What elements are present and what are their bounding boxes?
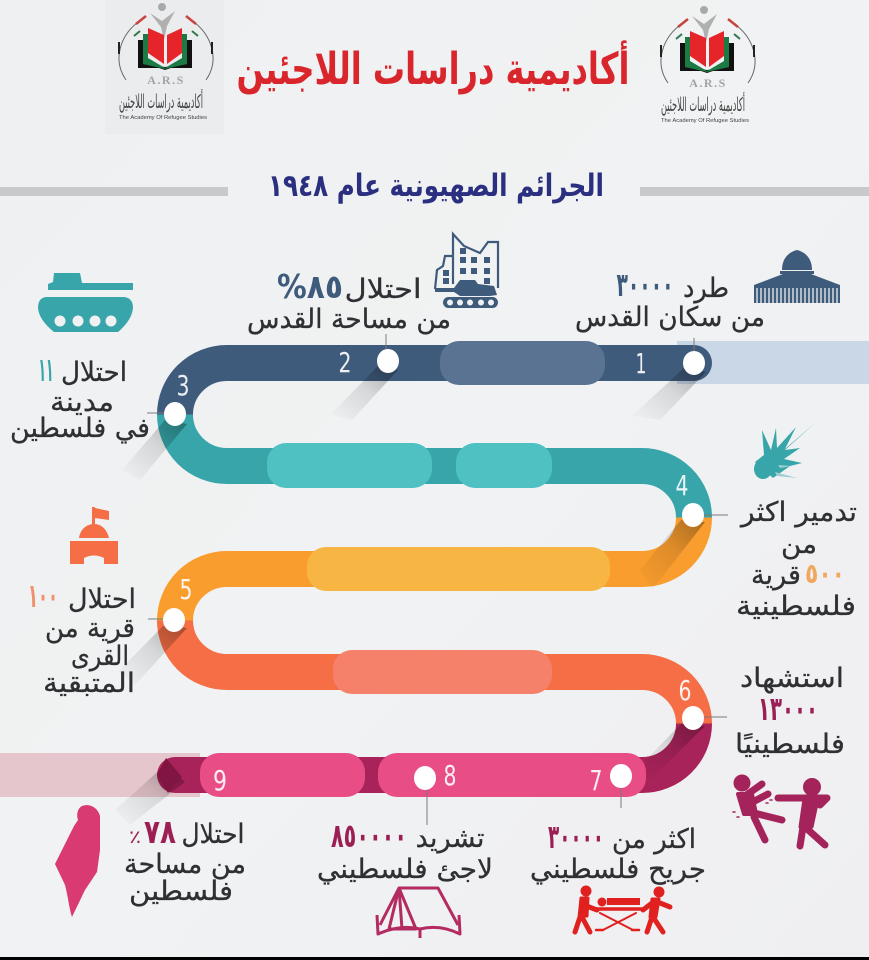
milestone numbers: 4 bbox=[676, 469, 688, 502]
label 9 bbox=[124, 812, 246, 907]
highlight pills bbox=[200, 341, 646, 797]
label 9: من مساحة bbox=[124, 849, 246, 880]
icon: tank bbox=[38, 273, 133, 332]
label 4: ٥٠٠ bbox=[805, 557, 845, 590]
label 7 bbox=[530, 817, 706, 885]
milestone numbers: 2 bbox=[338, 346, 352, 379]
label 5 bbox=[28, 576, 136, 699]
label 9: ٪ bbox=[129, 827, 141, 848]
label 5: المتبقية bbox=[43, 668, 135, 699]
segment: navy bbox=[175, 345, 712, 414]
end bands bbox=[0, 341, 869, 797]
bottom strip bbox=[0, 957, 869, 960]
label 5: احتلال bbox=[68, 584, 136, 615]
label 4: فلسطينية bbox=[736, 591, 856, 622]
icon: castle with flag bbox=[70, 507, 118, 564]
logo: Academy of Refugee Studies (left): A.R.S bbox=[147, 73, 185, 87]
label 1: ٣٠٠٠٠ bbox=[616, 265, 674, 304]
label 3: مدينة bbox=[50, 387, 114, 418]
text: أكاديمية دراسات اللاجئين bbox=[119, 89, 203, 113]
label 6: ١٣٠٠٠ bbox=[758, 689, 818, 728]
icon: dome of the rock bbox=[754, 250, 840, 303]
logo: Academy of Refugee Studies (right): The Academy Of Refugee Studies bbox=[661, 118, 750, 124]
logo: Academy of Refugee Studies (left) bbox=[119, 3, 213, 121]
milestone numbers: 8 bbox=[444, 759, 456, 792]
label 6: استشهاد bbox=[740, 663, 844, 694]
leader lines bbox=[147, 334, 728, 825]
label 1 bbox=[575, 265, 765, 333]
icon: stretcher with wounded bbox=[575, 886, 670, 932]
milestone numbers bbox=[176, 346, 692, 797]
milestone numbers: 7 bbox=[590, 764, 602, 797]
milestone dots bbox=[163, 349, 705, 790]
segment: teal bbox=[175, 414, 694, 518]
icon: tent bbox=[377, 888, 460, 938]
label 8 bbox=[317, 816, 493, 885]
icon: map of Palestine bbox=[55, 805, 100, 917]
milestone numbers: 1 bbox=[636, 347, 646, 380]
label 5: القرى bbox=[71, 641, 129, 672]
label 2: احتلال bbox=[344, 274, 422, 305]
label 6 bbox=[735, 663, 845, 760]
label 9: احتلال bbox=[182, 819, 244, 850]
label 7: اكثر من bbox=[612, 824, 696, 855]
text: أكاديمية دراسات اللاجئين bbox=[661, 92, 745, 116]
label 6: فلسطينيًا bbox=[735, 729, 845, 760]
milestone numbers: 6 bbox=[678, 674, 692, 707]
label 8: تشريد bbox=[416, 823, 484, 854]
label 9: فلسطين bbox=[129, 876, 233, 907]
label 2: ٨٥% bbox=[277, 267, 343, 306]
label 1: من سكان القدس bbox=[575, 302, 765, 333]
label 4: قرية bbox=[751, 560, 801, 591]
label 8: لاجئ فلسطيني bbox=[317, 854, 493, 885]
subtitle: الجرائم الصهيونية عام ١٩٤٨ bbox=[268, 168, 604, 204]
label 4 bbox=[736, 497, 857, 622]
label 2: من مساحة القدس bbox=[247, 304, 451, 335]
label 3: احتلال bbox=[61, 357, 127, 388]
label 1: طرد bbox=[683, 273, 729, 304]
label 5: ١٠٠ bbox=[28, 576, 58, 615]
label 3: في فلسطين bbox=[10, 413, 150, 444]
milestone numbers: 9 bbox=[213, 764, 227, 797]
timeline track bbox=[0, 341, 869, 797]
logo: Academy of Refugee Studies (left): The Academy Of Refugee Studies bbox=[119, 115, 208, 121]
logo: Academy of Refugee Studies (right): A.R.S bbox=[689, 76, 727, 90]
segment: coral bbox=[175, 620, 694, 724]
label 4: تدمير اكثر bbox=[739, 497, 857, 528]
milestone numbers: 3 bbox=[176, 369, 190, 402]
segment: orange bbox=[175, 518, 694, 620]
icon: explosion bbox=[754, 423, 815, 479]
left logo backdrop bbox=[105, 0, 224, 134]
logo: Academy of Refugee Studies (right) bbox=[661, 6, 755, 124]
subtitle bars bbox=[0, 187, 869, 196]
label 9: ٧٨ bbox=[144, 812, 176, 851]
label 7: ٣٠٠٠٠ bbox=[548, 817, 604, 856]
maroon end chevron bbox=[157, 758, 182, 793]
milestone numbers: 5 bbox=[180, 573, 192, 606]
label 5: قرية من bbox=[45, 613, 135, 644]
icon: ruined building with tank bbox=[435, 234, 498, 308]
label 7: جريح فلسطيني bbox=[530, 854, 706, 885]
icon: shooting figures bbox=[733, 775, 827, 846]
label 4: من bbox=[781, 529, 817, 560]
diagonal shadows bbox=[115, 366, 706, 825]
segment: maroon bbox=[157, 724, 694, 793]
label 2 bbox=[247, 267, 451, 335]
label 8: ٨٥٠٠٠٠ bbox=[331, 816, 407, 855]
title: أكاديمية دراسات اللاجئين bbox=[236, 40, 630, 95]
label 3: ١١ bbox=[38, 350, 54, 389]
label 3 bbox=[10, 350, 150, 444]
